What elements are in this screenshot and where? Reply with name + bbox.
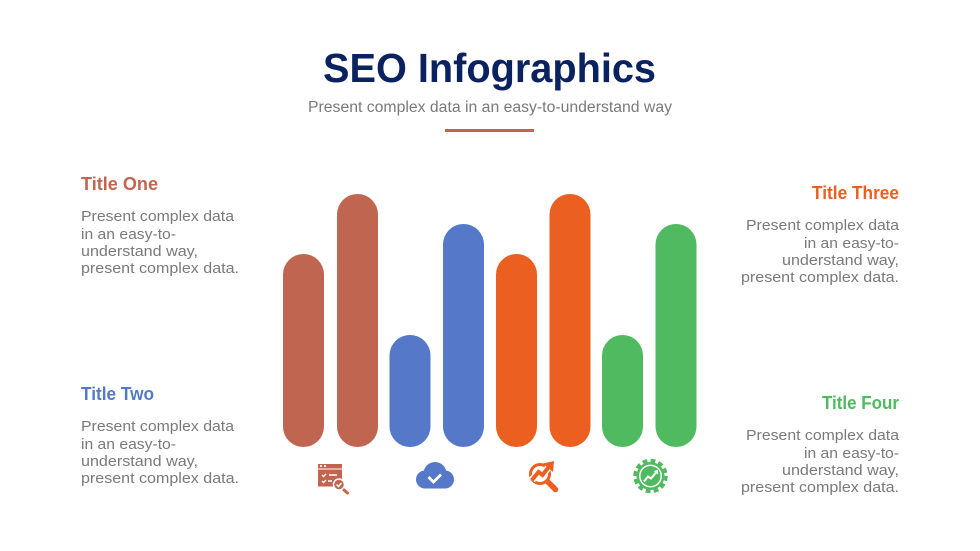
body: title three: present complex data. — [741, 269, 899, 286]
body: title one — [81, 208, 239, 277]
body: title four: present complex data. — [741, 479, 899, 496]
body: title three: Present complex data — [746, 217, 900, 234]
icon: checklist with magnifier — [318, 464, 348, 493]
icon: magnifier with rising arrow — [530, 461, 556, 490]
body: title three: in an easy-to- — [804, 235, 899, 252]
heading: title three: Title Three — [812, 183, 899, 203]
body: title one: present complex data. — [81, 260, 239, 277]
body: title four: understand way, — [782, 462, 899, 479]
body: title one: Present complex data — [81, 208, 235, 225]
bars: orange pair — [496, 194, 590, 447]
bar chart — [283, 194, 696, 447]
text block: title four — [741, 393, 900, 496]
body: title two: in an easy-to- — [81, 436, 176, 453]
title: SEO Infographics — [323, 45, 656, 91]
bars: blue pair — [390, 224, 484, 447]
heading: title one: Title One — [81, 174, 158, 194]
body: title two: present complex data. — [81, 470, 239, 487]
text block: title three — [741, 183, 900, 286]
icon: cloud with check — [416, 462, 454, 488]
bars: green pair — [602, 224, 696, 447]
body: title four: Present complex data — [746, 427, 900, 444]
body: title four: in an easy-to- — [804, 445, 899, 462]
body: title two: Present complex data — [81, 418, 235, 435]
heading: title two: Title Two — [81, 384, 154, 404]
bars: brown pair — [283, 194, 378, 447]
body: title two: understand way, — [81, 453, 198, 470]
body: title three — [741, 217, 900, 286]
body: title four — [741, 427, 900, 496]
text block: title one — [81, 174, 239, 277]
body: title two — [81, 418, 239, 487]
heading: title four: Title Four — [822, 393, 899, 413]
text block: title two — [81, 384, 239, 487]
body: title one: understand way, — [81, 243, 198, 260]
icon: gear with growth chart — [636, 461, 666, 491]
title underline — [445, 129, 534, 132]
body: title three: understand way, — [782, 252, 899, 269]
subtitle: Present complex data in an easy-to-understand way — [308, 99, 672, 116]
body: title one: in an easy-to- — [81, 226, 176, 243]
